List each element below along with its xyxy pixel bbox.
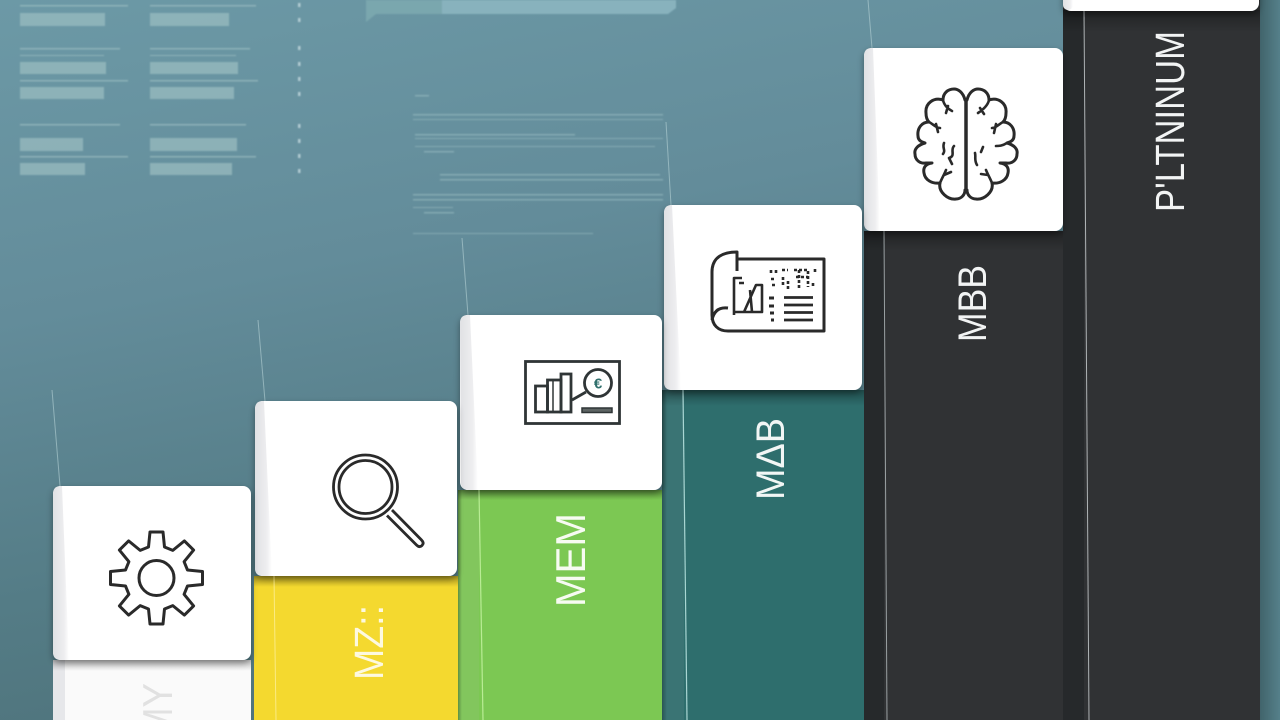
card 6: top card — [1063, 0, 1259, 11]
step 5 bar: MBB — [864, 231, 1063, 720]
icon: presentation chart — [526, 362, 620, 424]
icon: blueprint document — [712, 252, 824, 331]
card 2: magnifier — [255, 401, 457, 576]
icon: brain — [915, 89, 1017, 199]
bar label: platinum: P'LTNINUM — [1147, 31, 1193, 212]
step 4 bar: MAB — [662, 390, 864, 720]
icon: presentation chart: € — [594, 376, 603, 392]
bar label: MEM: MEM — [547, 513, 594, 607]
step 2 bar: yellow — [254, 576, 458, 720]
background connector lines — [52, 0, 872, 486]
bar label: MBB: MBB — [951, 265, 995, 342]
card 4: blueprint — [664, 205, 862, 390]
bar label: MAB: MΔB — [749, 418, 793, 500]
bar label: yellow step: MZ:: — [346, 605, 392, 680]
icon: gear — [110, 532, 202, 624]
card 1: gear — [53, 486, 251, 660]
card 5: brain — [864, 48, 1063, 231]
step 1 bar: white — [53, 660, 251, 720]
icon: magnifying glass — [334, 455, 423, 547]
step 3 bar: MEM — [458, 490, 662, 720]
card 3: chart — [460, 315, 662, 490]
right edge strip — [1258, 0, 1280, 720]
background panel: faint data table — [20, 3, 300, 175]
background panel: faint line list — [413, 95, 663, 234]
background banner — [366, 0, 676, 22]
step 6 bar: platinum — [1063, 0, 1260, 720]
